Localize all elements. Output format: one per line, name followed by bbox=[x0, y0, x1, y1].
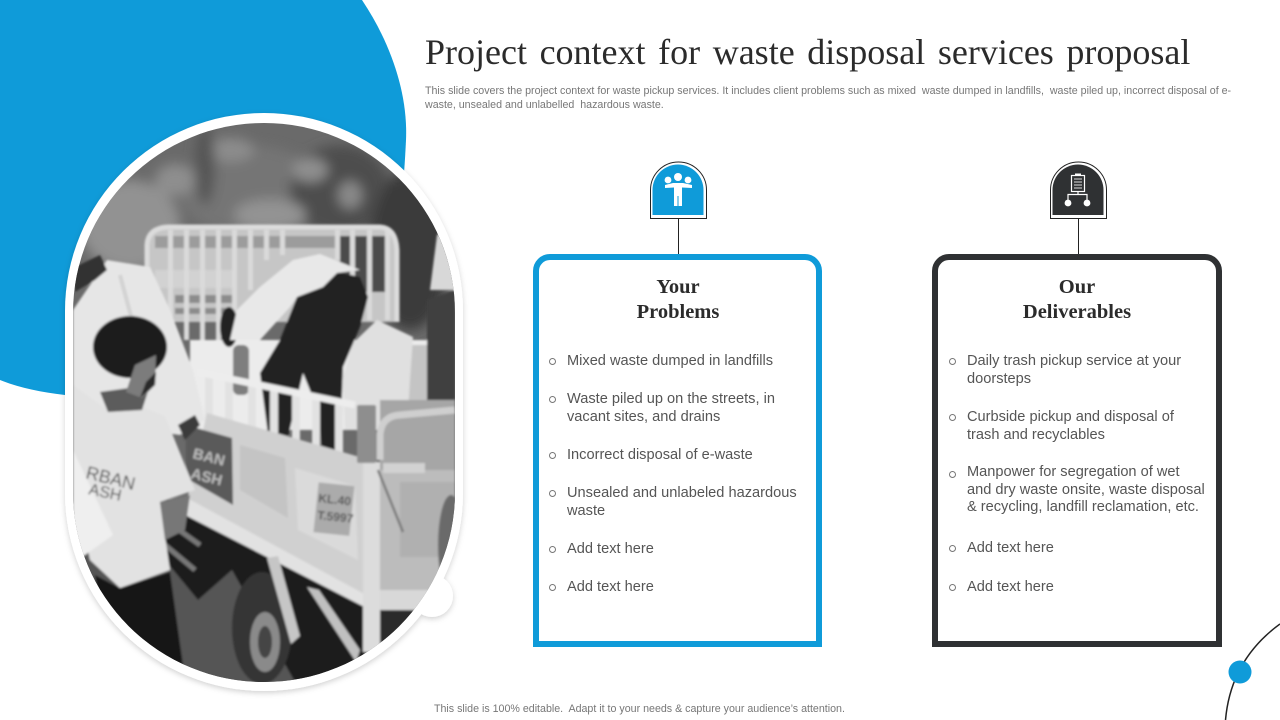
truck rail bbox=[206, 379, 344, 454]
bending person bbox=[220, 307, 238, 347]
panel: your problems bbox=[533, 254, 822, 647]
heading: your problems: Your bbox=[656, 276, 700, 298]
wheel bbox=[232, 572, 292, 684]
heading: our deliverables: Our bbox=[1059, 276, 1095, 298]
photo: workers loading sacks on a truck bbox=[62, 112, 466, 696]
heading: our deliverables bbox=[1023, 276, 1131, 323]
problems list: Add text here bbox=[567, 579, 654, 595]
panel: our deliverables bbox=[932, 254, 1222, 647]
right person bbox=[426, 290, 455, 402]
deliverables list: Curbside pickup and disposal of bbox=[967, 409, 1174, 425]
ground and undercarriage bbox=[73, 500, 380, 682]
icon: clipboard with hierarchy bbox=[1050, 162, 1107, 254]
fence bbox=[148, 228, 396, 324]
description text bbox=[425, 85, 1231, 111]
deliverables list: & recycling, landfill reclamation, etc. bbox=[967, 499, 1199, 515]
title: Project context for waste disposal services proposal bbox=[425, 32, 1190, 72]
problems list: Mixed waste dumped in landfills bbox=[567, 353, 773, 369]
photo: workers loading sacks on a truck: ASH bbox=[189, 465, 224, 490]
deliverables list: doorsteps bbox=[967, 371, 1031, 387]
description text: This slide covers the project context for waste pickup services. It includes client problems such as mixed waste dumped in landfills, waste piled up, incorrect disposal of e- bbox=[425, 85, 1231, 97]
deliverables list: and dry waste onsite, waste disposal bbox=[967, 482, 1205, 498]
heading: your problems: Problems bbox=[637, 301, 719, 323]
photo: workers loading sacks on a truck: BAN bbox=[191, 445, 227, 470]
footer note: This slide is 100% editable. Adapt it to your needs & capture your audience’s attention. bbox=[434, 703, 845, 715]
deliverables list bbox=[949, 353, 1205, 595]
problems list bbox=[549, 353, 797, 595]
heading: our deliverables: Deliverables bbox=[1023, 301, 1131, 323]
problems list: waste bbox=[567, 503, 605, 519]
right sack bbox=[343, 320, 413, 430]
photo: workers loading sacks on a truck: RBAN bbox=[84, 462, 137, 494]
description text: waste, unsealed and unlabelled hazardous waste. bbox=[425, 99, 664, 111]
icon: person balancing choices bbox=[650, 162, 707, 254]
deliverables list: Daily trash pickup service at your bbox=[967, 353, 1181, 369]
heading: your problems bbox=[636, 276, 719, 323]
problems list: Incorrect disposal of e-waste bbox=[567, 447, 753, 463]
deliverables list: Add text here bbox=[967, 540, 1054, 556]
deliverables list: Add text here bbox=[967, 579, 1054, 595]
rear truck section bbox=[380, 400, 455, 480]
problems list: Waste piled up on the streets, in bbox=[567, 391, 775, 407]
photo: workers loading sacks on a truck: T.5997 bbox=[317, 508, 354, 526]
left sack bbox=[73, 260, 205, 435]
deliverables list: trash and recyclables bbox=[967, 427, 1105, 443]
rear backdrop bbox=[408, 344, 428, 401]
problems list: Unsealed and unlabeled hazardous bbox=[567, 485, 797, 501]
photo: workers loading sacks on a truck: KL.40 bbox=[318, 491, 352, 508]
corner decoration: arc and blue dot bbox=[1224, 623, 1280, 720]
problems list: vacant sites, and drains bbox=[567, 409, 720, 425]
photo: workers loading sacks on a truck: ASH bbox=[87, 481, 123, 505]
problems list: Add text here bbox=[567, 541, 654, 557]
truck side bbox=[187, 414, 364, 594]
deliverables list: Manpower for segregation of wet bbox=[967, 464, 1180, 480]
decorative blue blob bbox=[0, 0, 406, 395]
left man bbox=[73, 419, 194, 590]
